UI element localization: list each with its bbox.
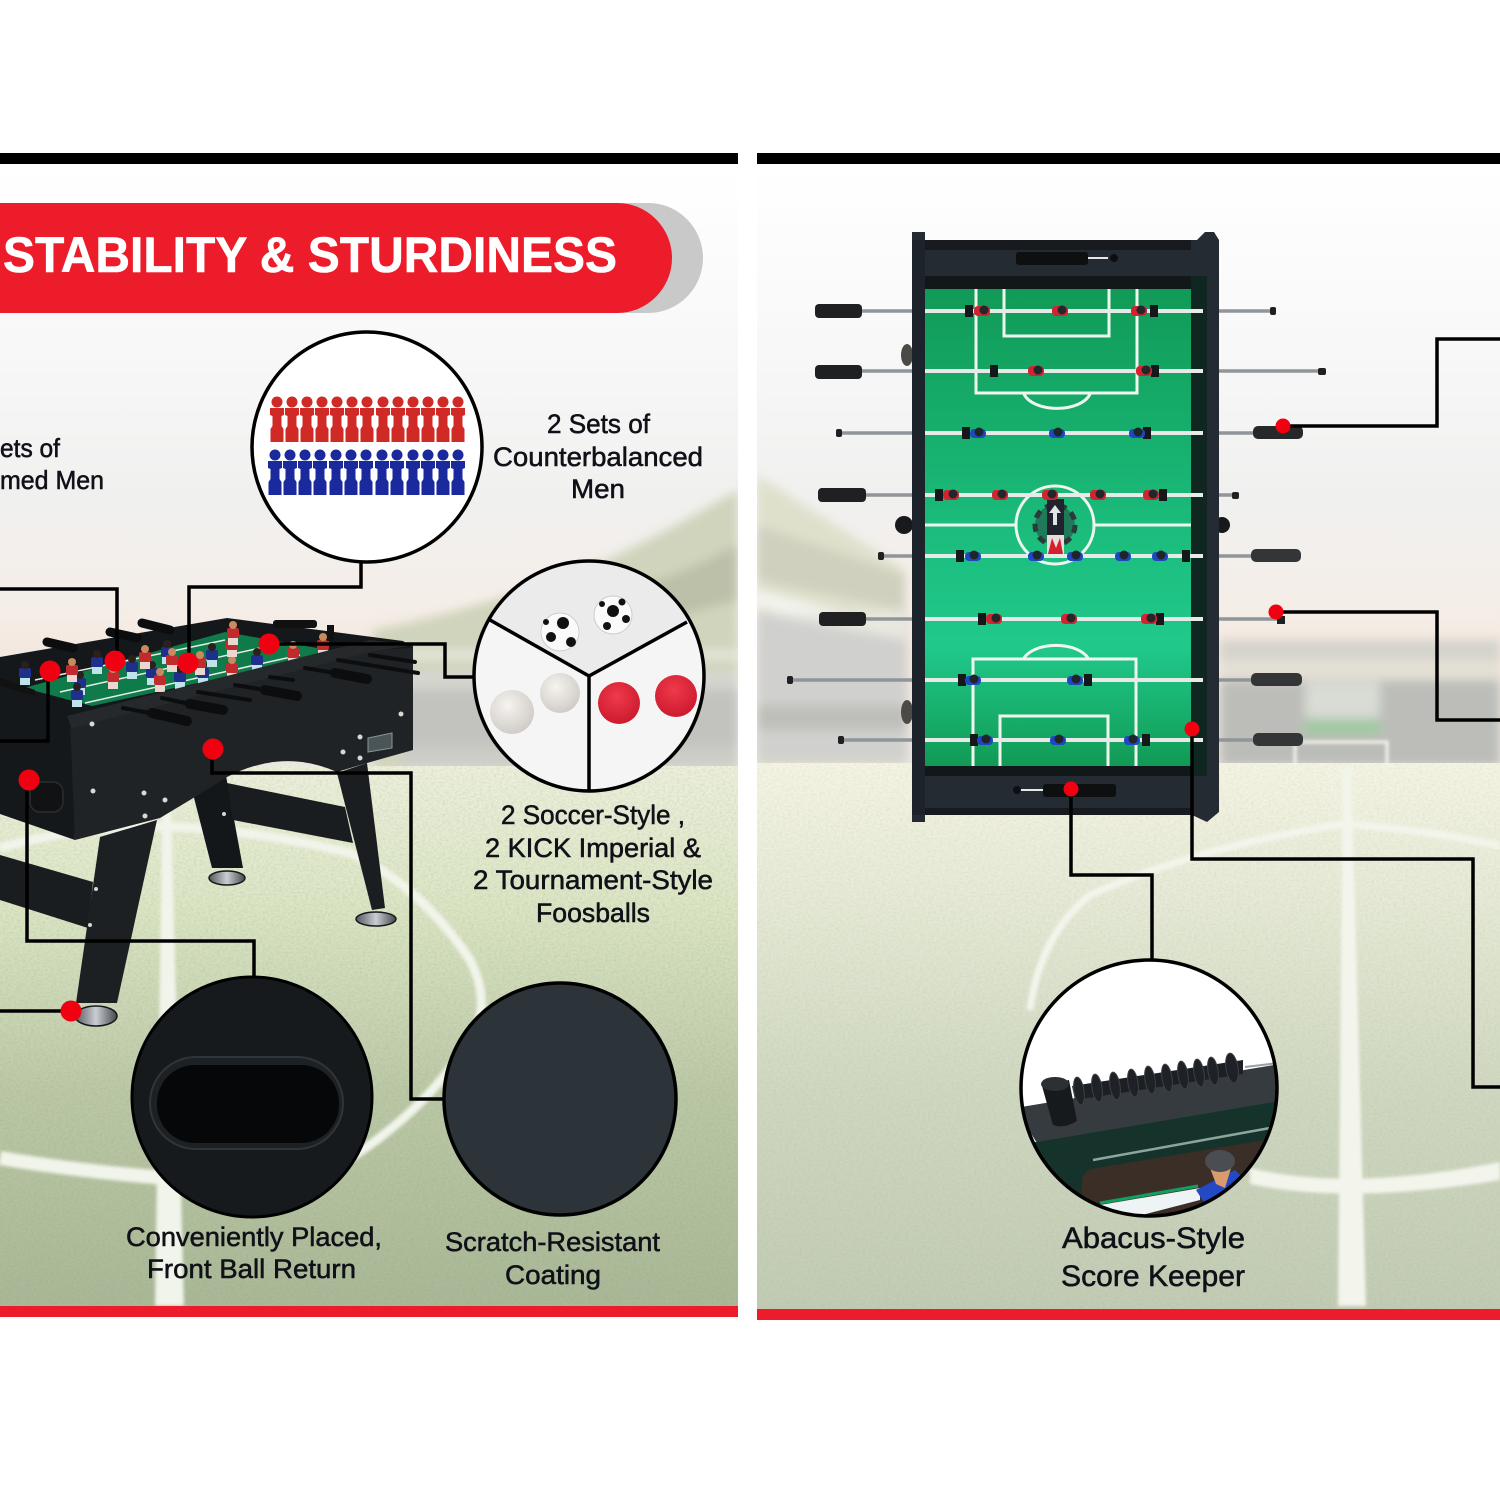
adjustable feet [75,871,396,1026]
soccer style balls [541,596,632,651]
label: scratch resistant coating [445,1227,660,1290]
label: foosballs: 2 KICK Imperial & [485,833,701,863]
label: foosballs: 2 Tournament-Style [473,865,713,895]
label: clipped sets of armed men: med Men [0,465,104,495]
red balls [598,682,640,724]
panel: left stability and sturdiness [0,153,738,1317]
red marker dots left [18,634,280,1022]
label: counterbalanced men: Men [571,474,625,504]
red footer rule left [0,1306,738,1317]
score keepers on table [0,620,334,696]
red marker dots right [1064,418,1290,796]
white tournament balls [490,690,534,734]
title text: STABILITY & STURDINESS [3,227,617,283]
title banner [0,203,703,313]
red footer rule right [757,1309,1500,1320]
circle: scratch resistant coating [444,983,676,1215]
inner rods [925,311,1203,740]
pitch markings [925,289,1191,766]
label: abacus score keeper: Score Keeper [1061,1260,1245,1293]
label: ball return: Front Ball Return [147,1254,356,1284]
label: counterbalanced men [493,409,703,504]
label: counterbalanced men: Counterbalanced [493,442,703,472]
handles and rods [47,623,418,721]
label: abacus score keeper: Abacus-Style [1062,1222,1245,1255]
playfield and rails [0,618,413,726]
front rail lip [67,640,413,728]
label: counterbalanced men: 2 Sets of [547,409,650,439]
outer rods [789,311,1325,740]
rod handles [787,304,1326,746]
connector lines left [0,562,474,1099]
ball return slot on table [30,782,63,812]
label: foosballs: 2 Soccer-Style , [501,800,685,830]
circle: front ball return [132,977,372,1217]
label: foosballs [473,800,713,928]
circle: counterbalanced men [252,332,482,562]
black header rule right [757,153,1500,164]
stadium background left [0,366,738,1306]
red team players [943,306,1159,624]
ribbed score keeper [1072,1052,1278,1106]
foosball table top view [787,232,1326,822]
blue figures [268,450,465,495]
label: abacus score keeper [1061,1222,1245,1293]
logo plate [368,733,392,752]
label: scratch resistant coating: Scratch-Resistant [445,1227,660,1257]
label: ball return: Conveniently Placed, [126,1222,382,1252]
panel: right top view [757,153,1500,1320]
label: scratch resistant coating: Coating [505,1260,601,1290]
centre logo [1035,499,1075,556]
connector lines right [1071,339,1500,1087]
label: foosballs: Foosballs [536,898,650,928]
miniature players [19,621,329,707]
bumpers [935,305,1190,746]
miniature player [1196,1150,1240,1202]
cabinet frame [912,232,1219,822]
top score keeper [1016,252,1118,265]
red figures [270,396,465,442]
keeper post [1042,1080,1077,1126]
blue team players [965,428,1168,745]
rear leg and crossbar [0,763,385,1003]
cabinet [67,645,413,840]
label: clipped sets of armed men: ets of [0,433,61,463]
foosball table perspective [0,618,418,1026]
green playfield [925,289,1191,766]
rivets [88,712,404,927]
side knobs and ball returns [895,344,1230,724]
black header rule left [0,153,738,164]
label: ball return [126,1222,382,1284]
bottom score keeper [1013,784,1116,797]
label: clipped sets of armed men [0,433,104,495]
stadium background right [757,366,1500,1309]
circle: foosballs [474,560,705,795]
circle: abacus score keeper [1015,960,1280,1225]
